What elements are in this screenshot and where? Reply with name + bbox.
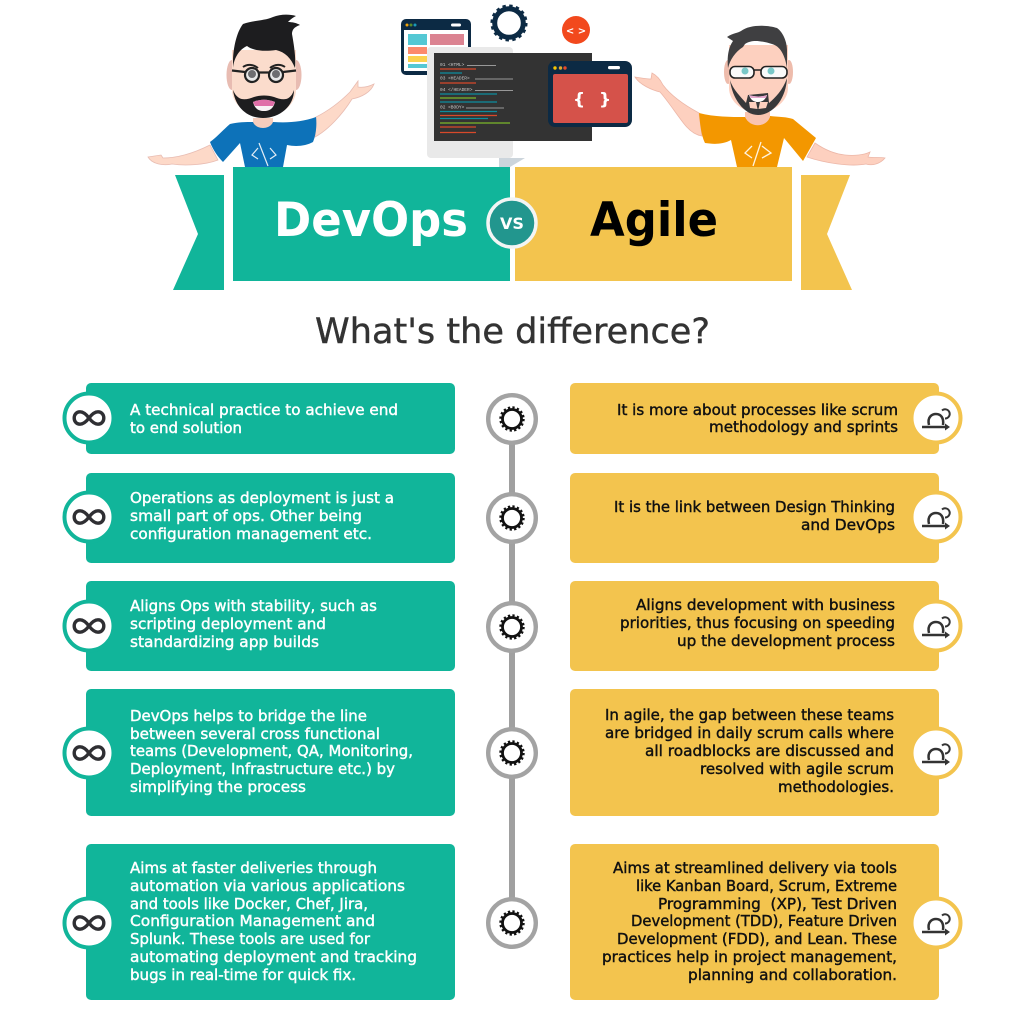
text: standardizing app builds xyxy=(130,634,319,651)
panel: DevOps row 1 xyxy=(64,383,455,454)
icon: back browser window xyxy=(401,19,471,75)
text xyxy=(130,708,413,796)
DevOps title: DevOps xyxy=(274,193,468,248)
text: and tools like Docker, Chef, Jira, xyxy=(130,896,368,913)
text: small part of ops. Other being xyxy=(130,508,362,525)
yellow banner panel xyxy=(515,167,792,281)
text xyxy=(130,860,417,984)
panel: DevOps row 5 xyxy=(64,844,455,1000)
text: automation via various applications xyxy=(130,878,405,895)
banner: DevOps xyxy=(173,167,510,290)
right ribbon tail xyxy=(801,175,852,290)
text: configuration management etc. xyxy=(130,526,372,543)
text xyxy=(614,499,895,534)
gear node 2 xyxy=(488,494,536,542)
text: priorities, thus focusing on speeding xyxy=(620,615,895,632)
icon: code badge: < > xyxy=(566,26,586,37)
monitor body xyxy=(427,47,513,158)
text: and DevOps xyxy=(801,517,895,534)
text: to end solution xyxy=(130,420,242,437)
icon: code brace window xyxy=(548,61,632,127)
text: are bridged in daily scrum calls where xyxy=(605,725,894,742)
text: resolved with agile scrum xyxy=(700,761,894,778)
text: Aims at streamlined delivery via tools xyxy=(613,860,897,877)
icon: infinity xyxy=(64,602,114,650)
text: Aligns Ops with stability, such as xyxy=(130,598,377,615)
gear node 1 xyxy=(488,395,536,443)
code screen: 02 <BODY> xyxy=(440,104,465,110)
icon: infinity xyxy=(64,492,114,542)
text: planning and collaboration. xyxy=(688,967,897,984)
icon: scrum loop xyxy=(912,898,960,948)
gear node 4 xyxy=(488,729,536,777)
icon: scrum loop xyxy=(912,492,960,542)
code screen: 04 </HEADER> xyxy=(440,87,473,93)
text: teams (Development, QA, Monitoring, xyxy=(130,743,413,760)
code screen xyxy=(434,53,592,141)
text: It is more about processes like scrum xyxy=(617,402,898,419)
text xyxy=(130,402,398,437)
text: scripting deployment and xyxy=(130,616,326,633)
panel: Agile row 4 xyxy=(570,689,960,816)
text xyxy=(620,597,895,650)
panel: Agile row 3 xyxy=(570,581,960,671)
text: Splunk. These tools are used for xyxy=(130,931,371,948)
text: DevOps helps to bridge the line xyxy=(130,708,367,725)
icon: code brace window: { xyxy=(573,90,585,110)
text: like Kanban Board, Scrum, Extreme xyxy=(636,878,897,895)
panel: DevOps row 3 xyxy=(64,581,455,671)
code screen: 03 <HEADER> xyxy=(440,76,470,82)
code screen: 01 <HTML> xyxy=(440,62,465,68)
panel: Agile row 1 xyxy=(570,383,960,454)
text: It is the link between Design Thinking xyxy=(614,499,895,516)
banner: Agile xyxy=(515,167,852,290)
text: Programming (XP), Test Driven xyxy=(658,896,897,913)
icon: infinity xyxy=(64,394,114,442)
text xyxy=(605,707,894,796)
text: Deployment, Infrastructure etc.) by xyxy=(130,761,395,778)
text: Configuration Management and xyxy=(130,913,375,930)
vs badge xyxy=(488,199,536,247)
icon: infinity xyxy=(64,898,114,948)
text: simplifying the process xyxy=(130,779,306,796)
text: between several cross functional xyxy=(130,726,380,743)
Agile title: Agile xyxy=(590,193,718,248)
panel: DevOps row 2 xyxy=(64,473,455,563)
icon: code brace window: } xyxy=(599,90,611,110)
left ribbon tail xyxy=(173,175,224,290)
panel: Agile row 2 xyxy=(570,473,960,563)
text: up the development process xyxy=(677,633,895,650)
icon: scrum loop xyxy=(912,394,960,442)
character: DevOps developer xyxy=(148,15,374,167)
icon: scrum loop xyxy=(912,602,960,650)
panel: DevOps row 4 xyxy=(64,689,455,816)
monitor stand xyxy=(499,158,525,167)
text: Development (FDD), and Lean. These xyxy=(617,931,897,948)
text xyxy=(617,402,898,436)
text: In agile, the gap between these teams xyxy=(605,707,894,724)
timeline line xyxy=(509,440,515,900)
gear node 5 xyxy=(488,899,536,947)
text xyxy=(602,860,897,984)
gear node 3 xyxy=(488,603,536,651)
panel: Agile row 5 xyxy=(570,844,960,1000)
text: Operations as deployment is just a xyxy=(130,490,394,507)
illustration: monitor with code windows xyxy=(401,6,632,167)
text: methodologies. xyxy=(778,779,894,796)
text: all roadblocks are discussed and xyxy=(645,743,894,760)
text: automating deployment and tracking xyxy=(130,949,417,966)
text: Development (TDD), Feature Driven xyxy=(631,913,897,930)
text xyxy=(130,598,377,651)
teal banner panel xyxy=(233,167,510,281)
center timeline xyxy=(488,395,536,947)
text: bugs in real-time for quick fix. xyxy=(130,967,356,984)
text: A technical practice to achieve end xyxy=(130,402,398,419)
icon: infinity xyxy=(64,728,114,778)
icon: large gear xyxy=(492,6,526,40)
text: methodology and sprints xyxy=(709,419,898,436)
text: practices help in project management, xyxy=(602,949,897,966)
icon: code badge xyxy=(562,16,590,44)
text xyxy=(130,490,394,543)
icon: scrum loop xyxy=(912,728,960,778)
text: Aims at faster deliveries through xyxy=(130,860,377,877)
heading: What's the difference? xyxy=(315,312,710,352)
character: Agile developer xyxy=(635,26,885,167)
vs badge: VS xyxy=(500,214,524,233)
text: Aligns development with business xyxy=(636,597,895,614)
